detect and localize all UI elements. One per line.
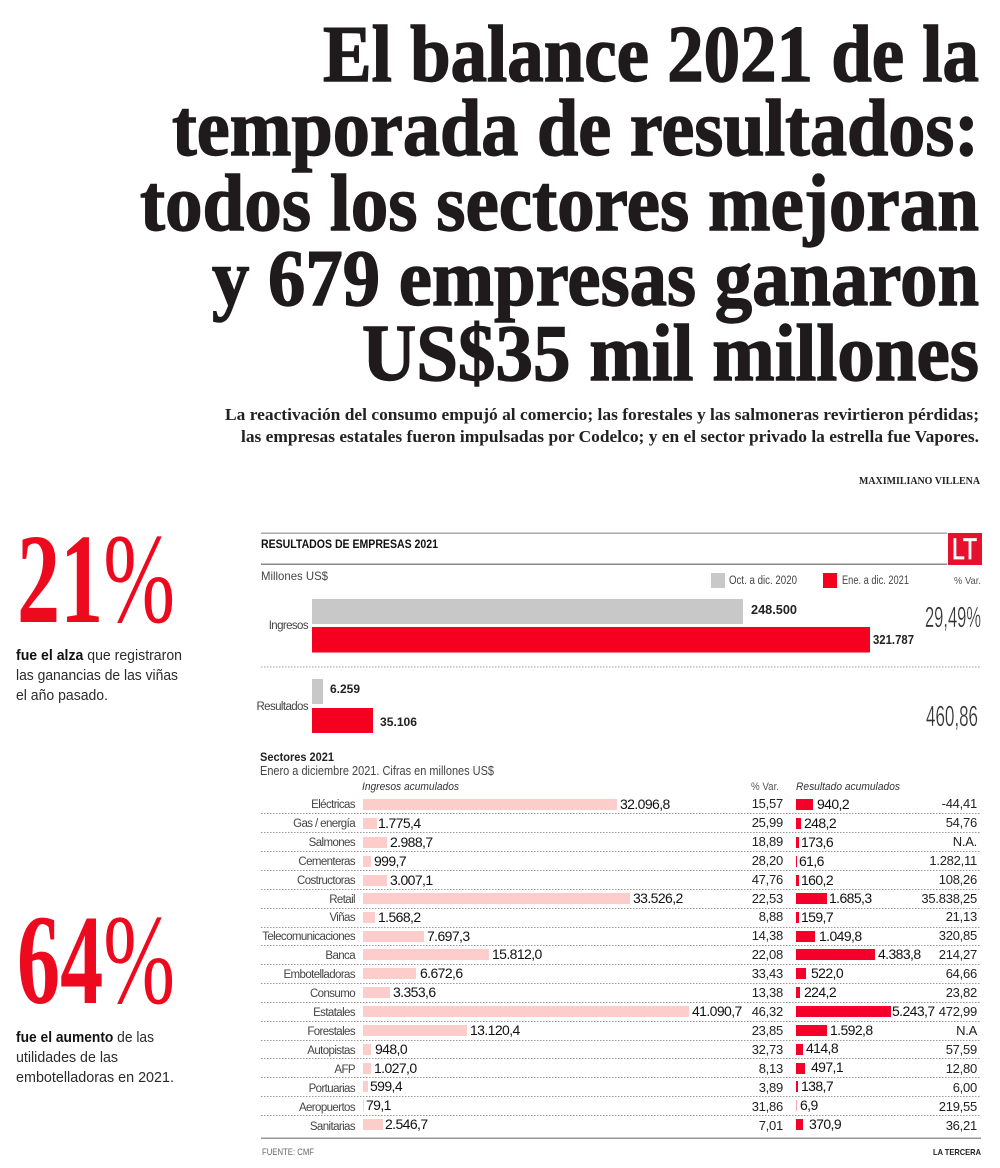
- legend: Ene. a dic. 2021: [842, 575, 909, 587]
- row: Telecomunicaciones: 7.697,3: [427, 928, 470, 944]
- row: Gas / energía: [293, 815, 977, 831]
- panel: resultados de empresas: [256, 532, 982, 733]
- panel: sectores 2021: [260, 750, 981, 1157]
- row: Salmones: 2.988,7: [390, 834, 433, 850]
- row: Estatales: 472,99: [939, 1004, 977, 1019]
- bar chart: resultados: [256, 679, 978, 733]
- callout text viñas: fue el alza que registraron: [16, 647, 182, 664]
- row: Aeropuertos: 6,9: [800, 1097, 818, 1113]
- row: Consumo: 224,2: [804, 984, 837, 1000]
- row: Telecomunicaciones: 14,38: [752, 928, 783, 943]
- subtitle: las empresas estatales fueron impulsadas por Codelco; y en el sector privado la estrella fue Vapores.: [241, 427, 979, 446]
- row: Cementeras: 1.282,11: [929, 853, 977, 868]
- sectores heading: Sectores 2021: [260, 750, 334, 764]
- row: Eléctricas: [311, 796, 977, 812]
- row: Portuarias: [309, 1078, 977, 1095]
- row: Consumo: 23,82: [946, 985, 977, 1000]
- row: Aeropuertos: Aeropuertos: [299, 1102, 356, 1114]
- legend: Oct. a dic. 2020: [729, 575, 797, 587]
- row: Telecomunicaciones: [262, 928, 977, 944]
- row: Portuarias: 3,89: [759, 1080, 783, 1095]
- row: Consumo: [310, 984, 977, 1000]
- bar chart: resultados: Resultados: [256, 701, 309, 713]
- row: Gas / energía: Gas / energía: [293, 818, 356, 830]
- row: Viñas: 8,88: [759, 909, 783, 924]
- row: Cementeras: 999,7: [374, 853, 407, 869]
- legend: % Var.: [954, 575, 981, 587]
- title: [140, 11, 979, 398]
- row: Gas / energía: 1.775,4: [378, 815, 421, 831]
- row: Viñas: 1.568,2: [378, 909, 421, 925]
- row: Costructoras: 108,26: [939, 872, 977, 887]
- row: Gas / energía: 248,2: [804, 815, 837, 831]
- bar chart: ingresos: Ingresos: [269, 620, 309, 632]
- row: Sanitarias: 36,21: [946, 1118, 977, 1133]
- row: Banca: Banca: [325, 950, 356, 962]
- row: Telecomunicaciones: 1.049,8: [819, 928, 862, 944]
- row: Retail: 35.838,25: [921, 891, 977, 906]
- callout text embotelladoras: embotelladoras en 2021.: [16, 1069, 174, 1086]
- callout text viñas: el año pasado.: [16, 687, 108, 704]
- big number 21%: 21%: [17, 508, 175, 650]
- row: Sanitarias: 7,01: [759, 1118, 783, 1133]
- callout text viñas: las ganancias de las viñas: [16, 667, 178, 684]
- row: Sanitarias: [310, 1116, 977, 1133]
- bar chart: ingresos: [269, 599, 981, 652]
- bar chart: resultados: 6.259: [330, 682, 360, 696]
- column headers: Resultado acumulados: [796, 781, 900, 793]
- bar chart: resultados: 35.106: [380, 715, 417, 729]
- unit label: Millones US$: [261, 569, 328, 583]
- row: Estatales: 46,32: [752, 1004, 783, 1019]
- legend: [711, 573, 981, 588]
- row: Gas / energía: 54,76: [946, 815, 977, 830]
- row: Forestales: N.A: [956, 1023, 978, 1038]
- row: Gas / energía: 25,99: [752, 815, 783, 830]
- row: Sanitarias: Sanitarias: [310, 1121, 356, 1133]
- credit: LA TERCERA: [933, 1147, 981, 1157]
- callout: 21%: [16, 508, 182, 704]
- row: Salmones: N.A.: [953, 834, 977, 849]
- row: Aeropuertos: 31,86: [752, 1099, 783, 1114]
- row: Cementeras: [298, 853, 977, 869]
- row: AFP: 8,13: [759, 1061, 783, 1076]
- row: Embotelladoras: 522,0: [811, 965, 844, 981]
- row: Autopistas: 32,73: [752, 1042, 783, 1057]
- row: Aeropuertos: [299, 1097, 977, 1114]
- row: Forestales: 13.120,4: [470, 1022, 521, 1038]
- row: Viñas: Viñas: [329, 912, 356, 924]
- row: Forestales: [307, 1022, 978, 1038]
- column headers: % Var.: [751, 781, 779, 793]
- row: Autopistas: 948,0: [375, 1041, 408, 1057]
- row: Eléctricas: -44,41: [942, 796, 977, 811]
- callout: 64%: [16, 889, 175, 1086]
- row: AFP: [334, 1059, 977, 1076]
- row: Sanitarias: 370,9: [809, 1116, 842, 1132]
- big number 64%: 64%: [17, 889, 175, 1031]
- row: Cementeras: Cementeras: [298, 856, 356, 868]
- row: Consumo: 13,38: [752, 985, 783, 1000]
- row: Viñas: [329, 909, 977, 925]
- row: Forestales: 1.592,8: [830, 1022, 873, 1038]
- row: Banca: [325, 946, 977, 962]
- callout text embotelladoras: fue el aumento de las: [16, 1029, 154, 1046]
- row: Eléctricas: 32.096,8: [620, 796, 671, 812]
- row: Consumo: Consumo: [310, 988, 355, 1000]
- row: Salmones: [309, 834, 977, 850]
- row: Salmones: 18,89: [752, 834, 783, 849]
- row: Estatales: 5.243,7: [892, 1003, 935, 1019]
- row: Banca: 15.812,0: [492, 946, 543, 962]
- row: Autopistas: [307, 1040, 977, 1057]
- row: Salmones: 173,6: [801, 834, 834, 850]
- row: Embotelladoras: 6.672,6: [420, 965, 463, 981]
- callout text viñas: [16, 647, 182, 704]
- row: Sanitarias: 2.546,7: [385, 1116, 428, 1132]
- row: Aeropuertos: 219,55: [939, 1099, 977, 1114]
- logo LT: LT: [952, 533, 977, 566]
- row: Portuarias: 599,4: [370, 1078, 403, 1094]
- row: Autopistas: Autopistas: [307, 1045, 356, 1057]
- sectores subtitle: Enero a diciembre 2021. Cifras en millones US$: [260, 764, 494, 778]
- row: Embotelladoras: 33,43: [752, 966, 783, 981]
- row: Autopistas: 57,59: [946, 1042, 977, 1057]
- row: Cementeras: 28,20: [752, 853, 783, 868]
- row: Portuarias: 138,7: [801, 1078, 834, 1094]
- row: Eléctricas: 940,2: [817, 796, 850, 812]
- row: Viñas: 21,13: [946, 909, 977, 924]
- row: Costructoras: 47,76: [752, 872, 783, 887]
- row: Costructoras: [297, 872, 977, 888]
- row: Embotelladoras: [283, 965, 977, 981]
- row: Aeropuertos: 79,1: [366, 1097, 392, 1113]
- row: AFP: 12,80: [946, 1061, 977, 1076]
- bar chart: ingresos: 248.500: [751, 603, 797, 617]
- column headers: Ingresos acumulados: [362, 781, 459, 793]
- row: Cementeras: 61,6: [799, 853, 825, 869]
- row: Eléctricas: 15,57: [752, 796, 783, 811]
- row: Retail: 1.685,3: [829, 890, 872, 906]
- row: Retail: 22,53: [752, 891, 783, 906]
- row: Portuarias: Portuarias: [309, 1083, 356, 1095]
- callout text embotelladoras: utilidades de las: [16, 1049, 118, 1066]
- row: Forestales: 23,85: [752, 1023, 783, 1038]
- row: Estatales: 41.090,7: [692, 1003, 743, 1019]
- row: Portuarias: 6,00: [953, 1080, 977, 1095]
- row: Estatales: [313, 1003, 977, 1019]
- row: AFP: 497,1: [811, 1059, 844, 1075]
- row: Costructoras: 160,2: [801, 872, 834, 888]
- row: Costructoras: Costructoras: [297, 875, 356, 887]
- row: Banca: 214,27: [939, 947, 977, 962]
- row: Salmones: Salmones: [309, 837, 356, 849]
- panel heading: RESULTADOS DE EMPRESAS 2021: [261, 539, 439, 551]
- source: FUENTE: CMF: [262, 1147, 314, 1157]
- byline: MAXIMILIANO VILLENA: [859, 476, 981, 487]
- row: Telecomunicaciones: 320,85: [939, 928, 977, 943]
- subtitle: La reactivación del consumo empujó al comercio; las forestales y las salmoneras revirtieron pérdidas;: [225, 405, 979, 424]
- row: AFP: 1.027,0: [374, 1060, 417, 1076]
- row: Eléctricas: Eléctricas: [311, 799, 356, 811]
- callout text embotelladoras: [16, 1029, 174, 1086]
- row: Banca: 22,08: [752, 947, 783, 962]
- row: Embotelladoras: Embotelladoras: [283, 969, 356, 981]
- row: Telecomunicaciones: Telecomunicaciones: [262, 931, 356, 943]
- row: Embotelladoras: 64,66: [946, 966, 977, 981]
- row: Retail: Retail: [329, 894, 355, 906]
- row: Consumo: 3.353,6: [393, 984, 436, 1000]
- row: Forestales: Forestales: [307, 1026, 356, 1038]
- row: Retail: [329, 890, 977, 906]
- row: Retail: 33.526,2: [633, 890, 684, 906]
- bar chart: ingresos: 321.787: [873, 633, 914, 647]
- row: Estatales: Estatales: [313, 1007, 356, 1019]
- subtitle: [225, 405, 979, 446]
- row: Costructoras: 3.007,1: [390, 872, 433, 888]
- row: Banca: 4.383,8: [878, 946, 921, 962]
- row: Autopistas: 414,8: [806, 1040, 839, 1056]
- row: AFP: AFP: [334, 1064, 356, 1076]
- row dividers: [261, 814, 981, 1116]
- column headers: [362, 781, 900, 793]
- row: Viñas: 159,7: [801, 909, 834, 925]
